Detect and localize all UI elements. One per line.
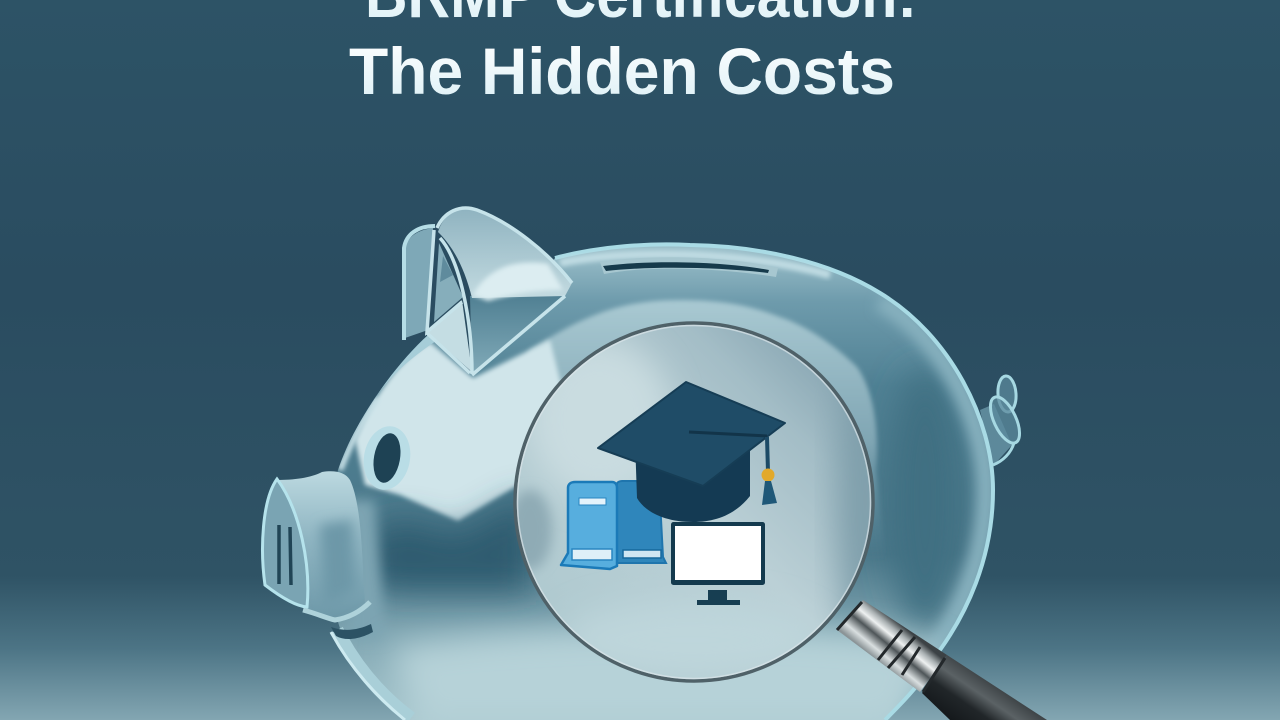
icon: eye bbox=[359, 422, 415, 494]
back book bbox=[617, 481, 666, 563]
lens glass bbox=[515, 323, 873, 681]
snout lower rim bbox=[303, 602, 370, 620]
ear lower fold bbox=[428, 300, 472, 372]
handle black grip bbox=[922, 655, 1047, 720]
rear ear rim bbox=[404, 226, 435, 340]
ear hole bbox=[434, 243, 463, 322]
metal rings bbox=[837, 602, 945, 692]
ear top bbox=[438, 208, 572, 298]
monitor stand bbox=[697, 590, 740, 605]
lower glass glow bbox=[390, 628, 940, 720]
icon: graduation cap bbox=[598, 382, 785, 522]
handle metal bbox=[837, 600, 947, 692]
icon: snout bbox=[263, 471, 373, 639]
ear panel bbox=[470, 294, 565, 375]
snout shading bbox=[320, 520, 355, 605]
ear highlight bbox=[473, 262, 563, 301]
top rim glow bbox=[560, 254, 830, 275]
shadow under face bbox=[368, 495, 530, 590]
cap button cord bbox=[689, 432, 767, 436]
slot opening bbox=[603, 262, 769, 273]
tassel knot bbox=[762, 468, 774, 482]
snout front bbox=[263, 479, 308, 607]
rear ear interior bbox=[405, 228, 433, 338]
icon: coin slot bbox=[600, 257, 778, 277]
nostrils bbox=[279, 525, 291, 585]
snout barrel bbox=[275, 471, 365, 620]
icon: front ear bbox=[427, 208, 572, 375]
head ridge bbox=[345, 336, 434, 452]
front book bbox=[561, 482, 617, 569]
left cheek glass bbox=[354, 494, 388, 622]
lower left rim highlight bbox=[331, 632, 405, 720]
tassel cord bbox=[767, 437, 768, 472]
front book label bbox=[579, 498, 606, 505]
slot highlight bbox=[600, 257, 778, 277]
title bbox=[349, 0, 917, 108]
front book pages bbox=[572, 549, 612, 560]
body base bbox=[329, 244, 993, 720]
inner rim band bbox=[880, 300, 986, 710]
ridge soft edge bbox=[340, 398, 378, 470]
mouth bbox=[331, 624, 373, 639]
cap base bbox=[635, 440, 750, 522]
title line 2: The Hidden Costs bbox=[349, 34, 895, 108]
cap board bbox=[598, 382, 785, 486]
ear outline bbox=[427, 208, 572, 375]
panel: pig body bbox=[322, 244, 993, 720]
icon: rear ear bbox=[404, 226, 435, 340]
lens sheen bbox=[508, 340, 893, 680]
body rim bbox=[555, 244, 993, 720]
monitor screen bbox=[675, 526, 761, 580]
shaded side bbox=[887, 370, 963, 630]
icon: curly tail bbox=[980, 375, 1026, 466]
tassel bbox=[762, 481, 777, 505]
lens: magnifying glass bbox=[508, 323, 1047, 720]
back book pages bbox=[623, 550, 661, 558]
lens halo bbox=[528, 298, 880, 528]
lower left rim bbox=[337, 630, 411, 718]
monitor frame bbox=[671, 522, 765, 585]
face highlight bbox=[355, 340, 570, 521]
ear hole shadow bbox=[440, 256, 453, 282]
icon: books bbox=[561, 481, 666, 569]
icon: monitor bbox=[671, 522, 765, 605]
lens ring bbox=[515, 323, 873, 681]
